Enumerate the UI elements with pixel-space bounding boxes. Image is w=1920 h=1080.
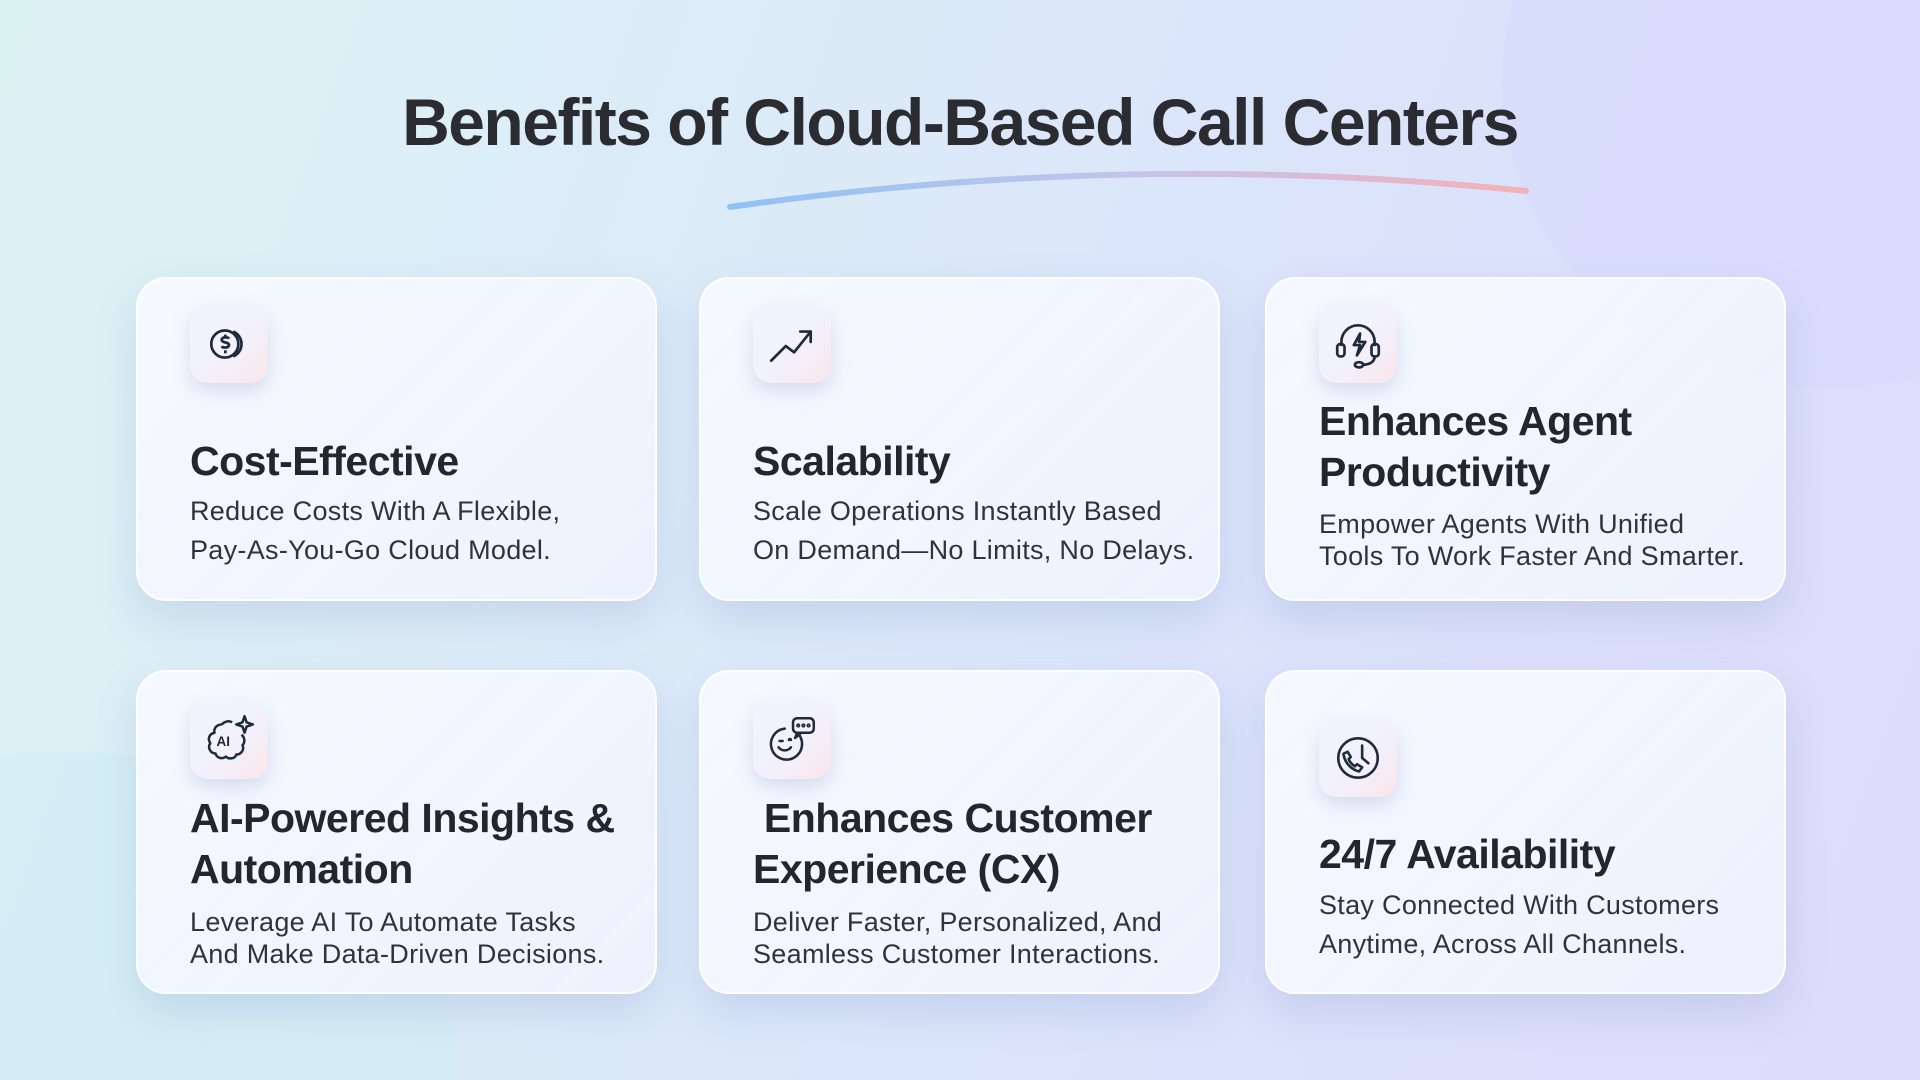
text: Pay-As-You-Go Cloud Model. (190, 535, 551, 565)
text: Leverage AI To Automate Tasks (190, 907, 576, 937)
text: Empower Agents With Unified (1319, 509, 1684, 539)
panel: customer experience (699, 670, 1220, 994)
heading: Automation (190, 846, 413, 892)
text (190, 496, 560, 565)
text: Reduce Costs With A Flexible, (190, 496, 560, 526)
text (1319, 509, 1745, 571)
text: Deliver Faster, Personalized, And (753, 907, 1162, 937)
panel: scalability (699, 277, 1220, 601)
heading: 24/7 Availability (1319, 831, 1615, 877)
text: On Demand—No Limits, No Delays. (753, 535, 1194, 565)
heading (753, 795, 1152, 892)
panel: cost-effective (136, 277, 657, 601)
panel: 24/7 availability (1265, 670, 1786, 994)
heading (190, 795, 615, 892)
panel: AI insights (136, 670, 657, 994)
text: Scale Operations Instantly Based (753, 496, 1162, 526)
text (753, 907, 1162, 969)
text: Tools To Work Faster And Smarter. (1319, 541, 1745, 571)
icon: AI brain (190, 701, 268, 779)
text (190, 907, 604, 969)
text: Stay Connected With Customers (1319, 890, 1719, 920)
icon: AI brain: AI (217, 734, 230, 749)
heading: Enhances Agent (1319, 398, 1632, 444)
icon: phone clock (1319, 719, 1397, 797)
icon: smiley chat (753, 701, 831, 779)
heading: Enhances Customer (764, 795, 1152, 841)
text: Anytime, Across All Channels. (1319, 929, 1686, 959)
icon: trend arrow (753, 305, 831, 383)
heading: Cost-Effective (190, 438, 459, 484)
heading: Experience (CX) (753, 846, 1060, 892)
text (753, 496, 1194, 565)
icon: dollar coins (190, 305, 268, 383)
heading: Scalability (753, 438, 950, 484)
title: Benefits of Cloud-Based Call Centers (402, 85, 1518, 159)
heading (1319, 398, 1632, 495)
heading: AI-Powered Insights & (190, 795, 615, 841)
text (1319, 890, 1719, 959)
text: Seamless Customer Interactions. (753, 939, 1160, 969)
icon: headset (1319, 305, 1397, 383)
title underline (727, 170, 1529, 210)
text: And Make Data-Driven Decisions. (190, 939, 604, 969)
heading: Productivity (1319, 449, 1550, 495)
panel: agent productivity (1265, 277, 1786, 601)
